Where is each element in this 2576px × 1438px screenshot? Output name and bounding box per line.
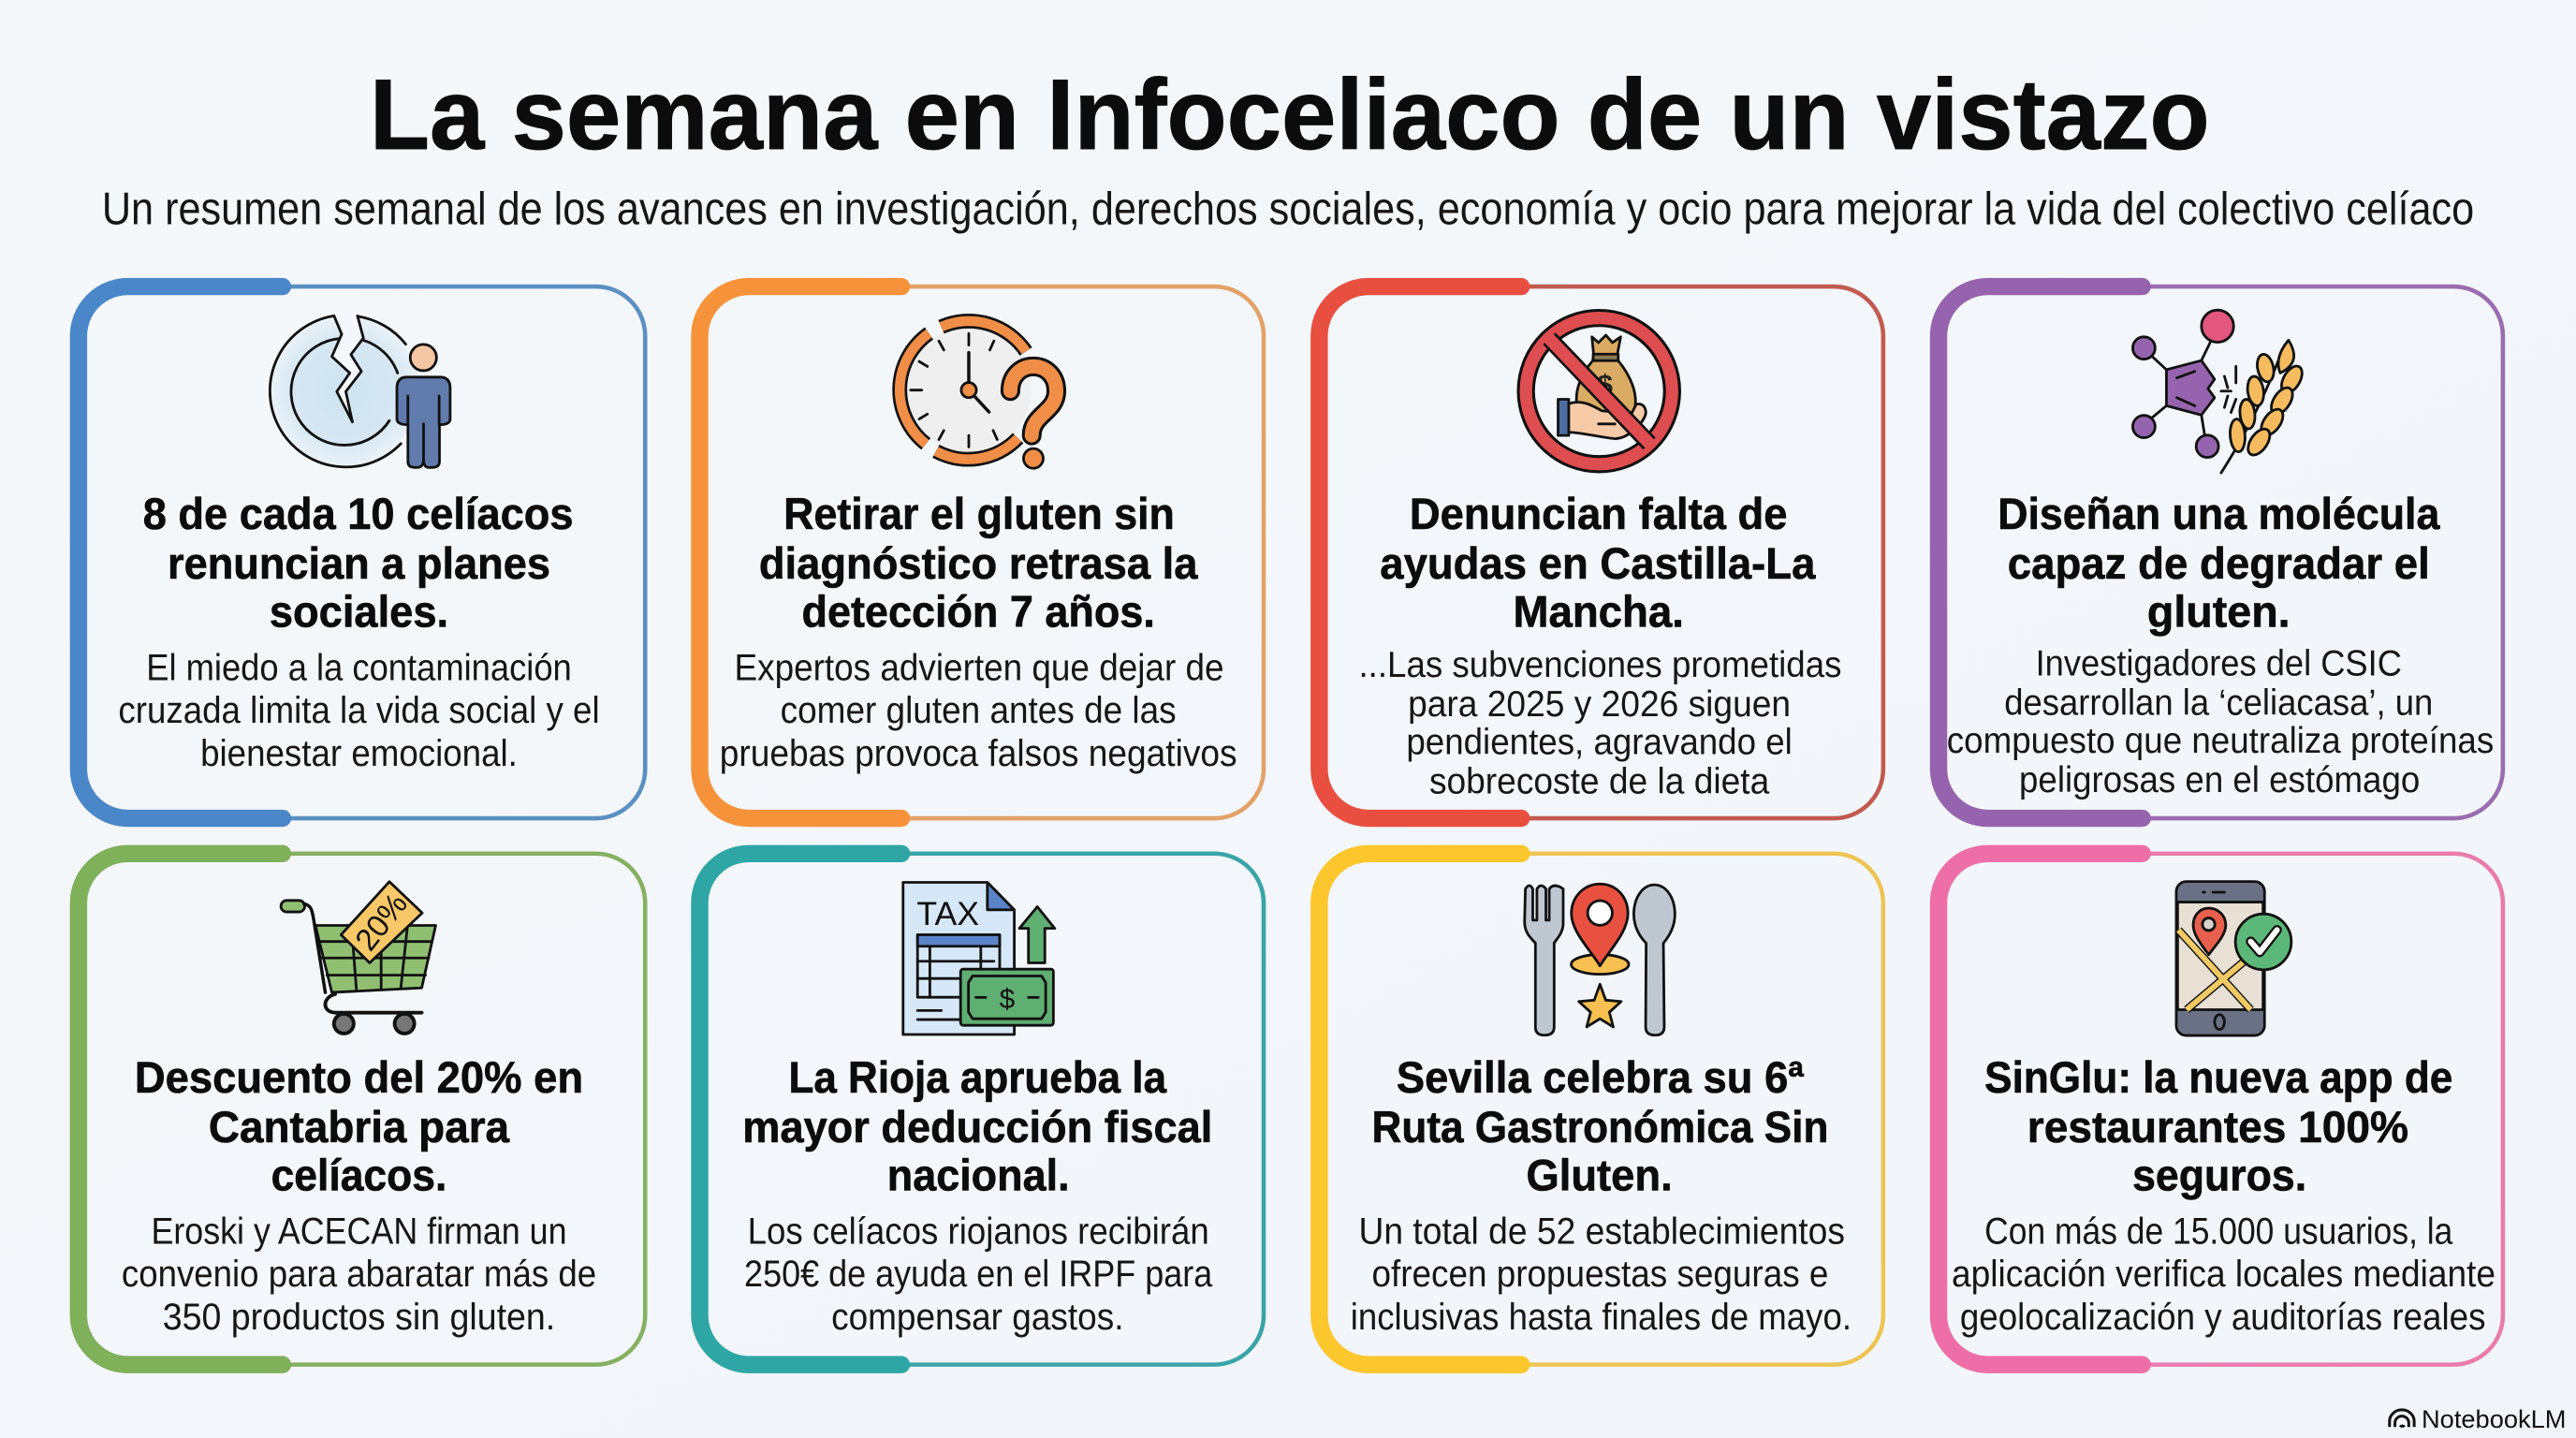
body text: Los celíacos riojanos recibirán: [748, 1211, 1209, 1253]
heading: Retirar el gluten sin: [783, 490, 1175, 539]
heading: SinGlu: la nueva app de: [1984, 1053, 2452, 1103]
body text: [118, 648, 600, 774]
card frame: purple: [1939, 286, 2503, 818]
body text: Investigadores del CSIC: [2036, 643, 2402, 683]
body text: [720, 648, 1237, 774]
heading: Descuento del 20% en: [135, 1053, 583, 1103]
heading: nacional.: [887, 1152, 1070, 1201]
heading: [1984, 1053, 2452, 1201]
body text: Con más de 15.000 usuarios, la: [1984, 1211, 2452, 1253]
body text: ...Las subvenciones prometidas: [1358, 645, 1841, 685]
icon: shopping cart with discount tag: 20%: [349, 887, 415, 958]
heading: Diseñan una molécula: [1998, 490, 2440, 539]
card frame: blue: [79, 286, 645, 818]
heading: Mancha.: [1513, 588, 1684, 638]
body text: para 2025 y 2026 siguen: [1408, 684, 1791, 725]
card frame: pink: [1939, 854, 2503, 1365]
heading: [1998, 490, 2440, 638]
panel: descuento Cantabria: [79, 854, 645, 1365]
body text: convenio para abaratar más de: [122, 1254, 596, 1295]
body text: compuesto que neutraliza proteínas: [1947, 721, 2494, 761]
panel: molécula: [1939, 286, 2503, 818]
heading: celíacos.: [271, 1152, 446, 1201]
body text: ofrecen propuestas seguras e: [1372, 1254, 1828, 1295]
icon: tax document and bill: $: [1000, 984, 1016, 1015]
body text: [1351, 1211, 1852, 1338]
body text: 250€ de ayuda en el IRPF para: [744, 1254, 1212, 1295]
heading: seguros.: [2132, 1152, 2306, 1201]
icon: broken circle and person: [270, 312, 450, 467]
body text: bienestar emocional.: [200, 733, 518, 774]
icon: molecule and wheat: [2132, 310, 2306, 473]
panel: 8 de cada 10 celíacos: [79, 286, 645, 818]
heading: capaz de degradar el: [2008, 539, 2430, 589]
NotebookLM logo: NotebookLM: [2422, 1404, 2566, 1433]
body text: [1947, 643, 2494, 800]
icon: no money bag: $: [1597, 370, 1613, 401]
panel: retirar el gluten: [699, 286, 1264, 818]
icon: tax document and bill: [903, 882, 1055, 1034]
body text: [122, 1211, 596, 1338]
heading: [1380, 490, 1816, 638]
body text: pruebas provoca falsos negativos: [720, 733, 1237, 774]
heading: mayor deducción fiscal: [742, 1103, 1212, 1152]
panel: SinGlu: [1939, 854, 2503, 1365]
heading: diagnóstico retrasa la: [759, 539, 1198, 589]
body text: geolocalización y auditorías reales: [1960, 1297, 2485, 1338]
heading: Denuncian falta de: [1410, 490, 1788, 539]
icon: shopping cart with discount tag: [281, 882, 435, 1034]
heading: Sevilla celebra su 6ª: [1397, 1053, 1805, 1103]
heading: Ruta Gastronómica Sin: [1372, 1103, 1828, 1152]
heading: sociales.: [270, 588, 448, 638]
body text: [1952, 1211, 2496, 1338]
heading: [143, 490, 574, 638]
heading: gluten.: [2147, 588, 2291, 638]
body text: [744, 1211, 1212, 1338]
panel: Sevilla: [1319, 854, 1883, 1365]
heading: Cantabria para: [209, 1103, 510, 1152]
body text: Un total de 52 establecimientos: [1358, 1211, 1845, 1253]
heading: ayudas en Castilla-La: [1380, 539, 1816, 589]
heading: detección 7 años.: [801, 588, 1155, 638]
body text: inclusivas hasta finales de mayo.: [1351, 1297, 1852, 1338]
body text: cruzada limita la vida social y el: [118, 690, 600, 731]
body text: comer gluten antes de las: [781, 690, 1177, 731]
icon: clock and question mark: [900, 321, 1057, 468]
panel: falta de ayudas: [1319, 286, 1883, 818]
body text: 350 productos sin gluten.: [163, 1297, 555, 1338]
body text: El miedo a la contaminación: [146, 648, 572, 689]
body text: [1358, 645, 1841, 802]
body text: desarrollan la ‘celiacasa’, un: [2004, 682, 2433, 723]
card frame: red: [1319, 286, 1883, 818]
heading: restaurantes 100%: [2027, 1103, 2408, 1152]
body text: Expertos advierten que dejar de: [735, 648, 1224, 689]
heading: [1372, 1053, 1828, 1201]
card frame: yellow: [1319, 854, 1883, 1365]
title: La semana en Infoceliaco de un vistazo: [370, 58, 2210, 170]
heading: Gluten.: [1526, 1152, 1673, 1201]
heading: [759, 490, 1198, 638]
card frame: teal: [699, 854, 1264, 1365]
body text: compensar gastos.: [831, 1297, 1123, 1338]
panel: La Rioja: [699, 854, 1264, 1365]
icon: no money bag: [1526, 318, 1672, 464]
icon: fork, pin, star and spoon: [1525, 884, 1675, 1035]
body text: peligrosas en el estómago: [2019, 760, 2420, 800]
heading: La Rioja aprueba la: [788, 1053, 1167, 1103]
heading: 8 de cada 10 celíacos: [143, 490, 574, 539]
body text: Eroski y ACECAN firman un: [151, 1211, 567, 1253]
heading: [135, 1053, 583, 1201]
card frame: orange: [699, 286, 1264, 818]
heading: renuncian a planes: [168, 539, 550, 589]
body text: pendientes, agravando el: [1406, 723, 1793, 763]
icon: tax document and bill: TAX: [916, 896, 979, 932]
body text: aplicación verifica locales mediante: [1952, 1254, 2496, 1295]
heading: [742, 1053, 1212, 1201]
card frame: green: [79, 854, 645, 1365]
body text: sobrecoste de la dieta: [1429, 762, 1770, 802]
icon: phone with map and check: [2176, 882, 2291, 1035]
